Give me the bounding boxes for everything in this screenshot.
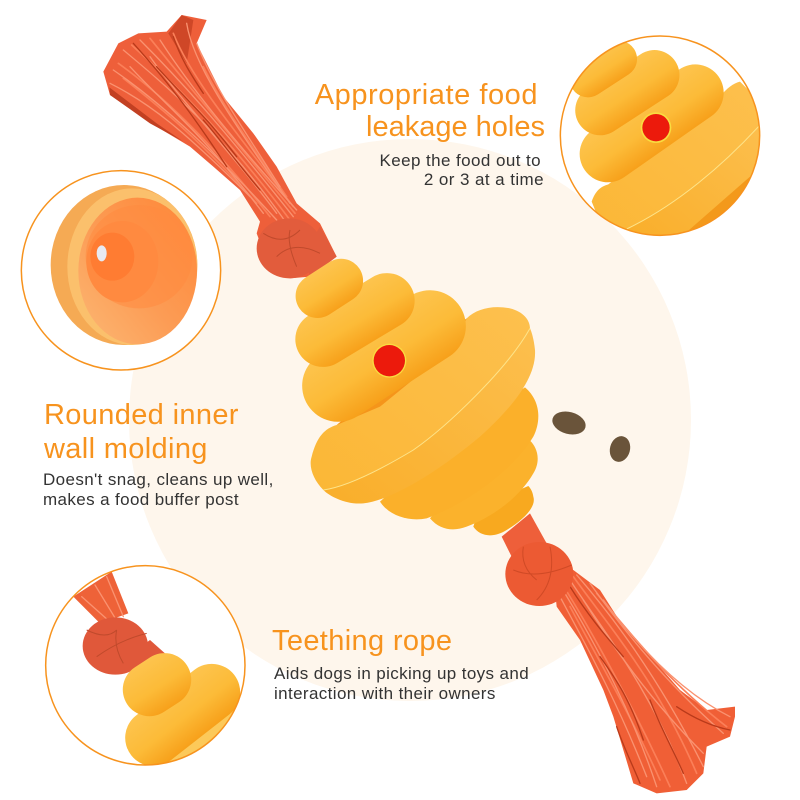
callout circle: teething rope xyxy=(46,566,252,778)
heading: rounded inner: Rounded inner xyxy=(44,399,239,431)
callout circle: inner wall xyxy=(21,171,221,370)
food pellets xyxy=(550,408,633,464)
heading: leakage holes: leakage holes xyxy=(366,111,545,143)
background circle xyxy=(129,139,691,701)
text: doesn't snag: Doesn't snag, cleans up well, xyxy=(43,470,274,489)
heading: teething rope: Teething rope xyxy=(272,625,452,657)
main toy body xyxy=(285,250,538,535)
heading: appropriate food: Appropriate food xyxy=(315,79,538,111)
text: 2 or 3 at a time: 2 or 3 at a time xyxy=(424,170,544,189)
top rope xyxy=(103,15,337,278)
text: interaction: interaction with their owners xyxy=(274,684,496,703)
heading: wall molding: wall molding xyxy=(43,433,208,465)
text: food buffer: makes a food buffer post xyxy=(43,490,239,509)
text: keep the food: Keep the food out to xyxy=(379,151,541,170)
callout circle: leakage holes xyxy=(560,34,767,238)
text: aids dogs: Aids dogs in picking up toys and xyxy=(274,664,529,683)
bottom rope xyxy=(502,513,735,793)
